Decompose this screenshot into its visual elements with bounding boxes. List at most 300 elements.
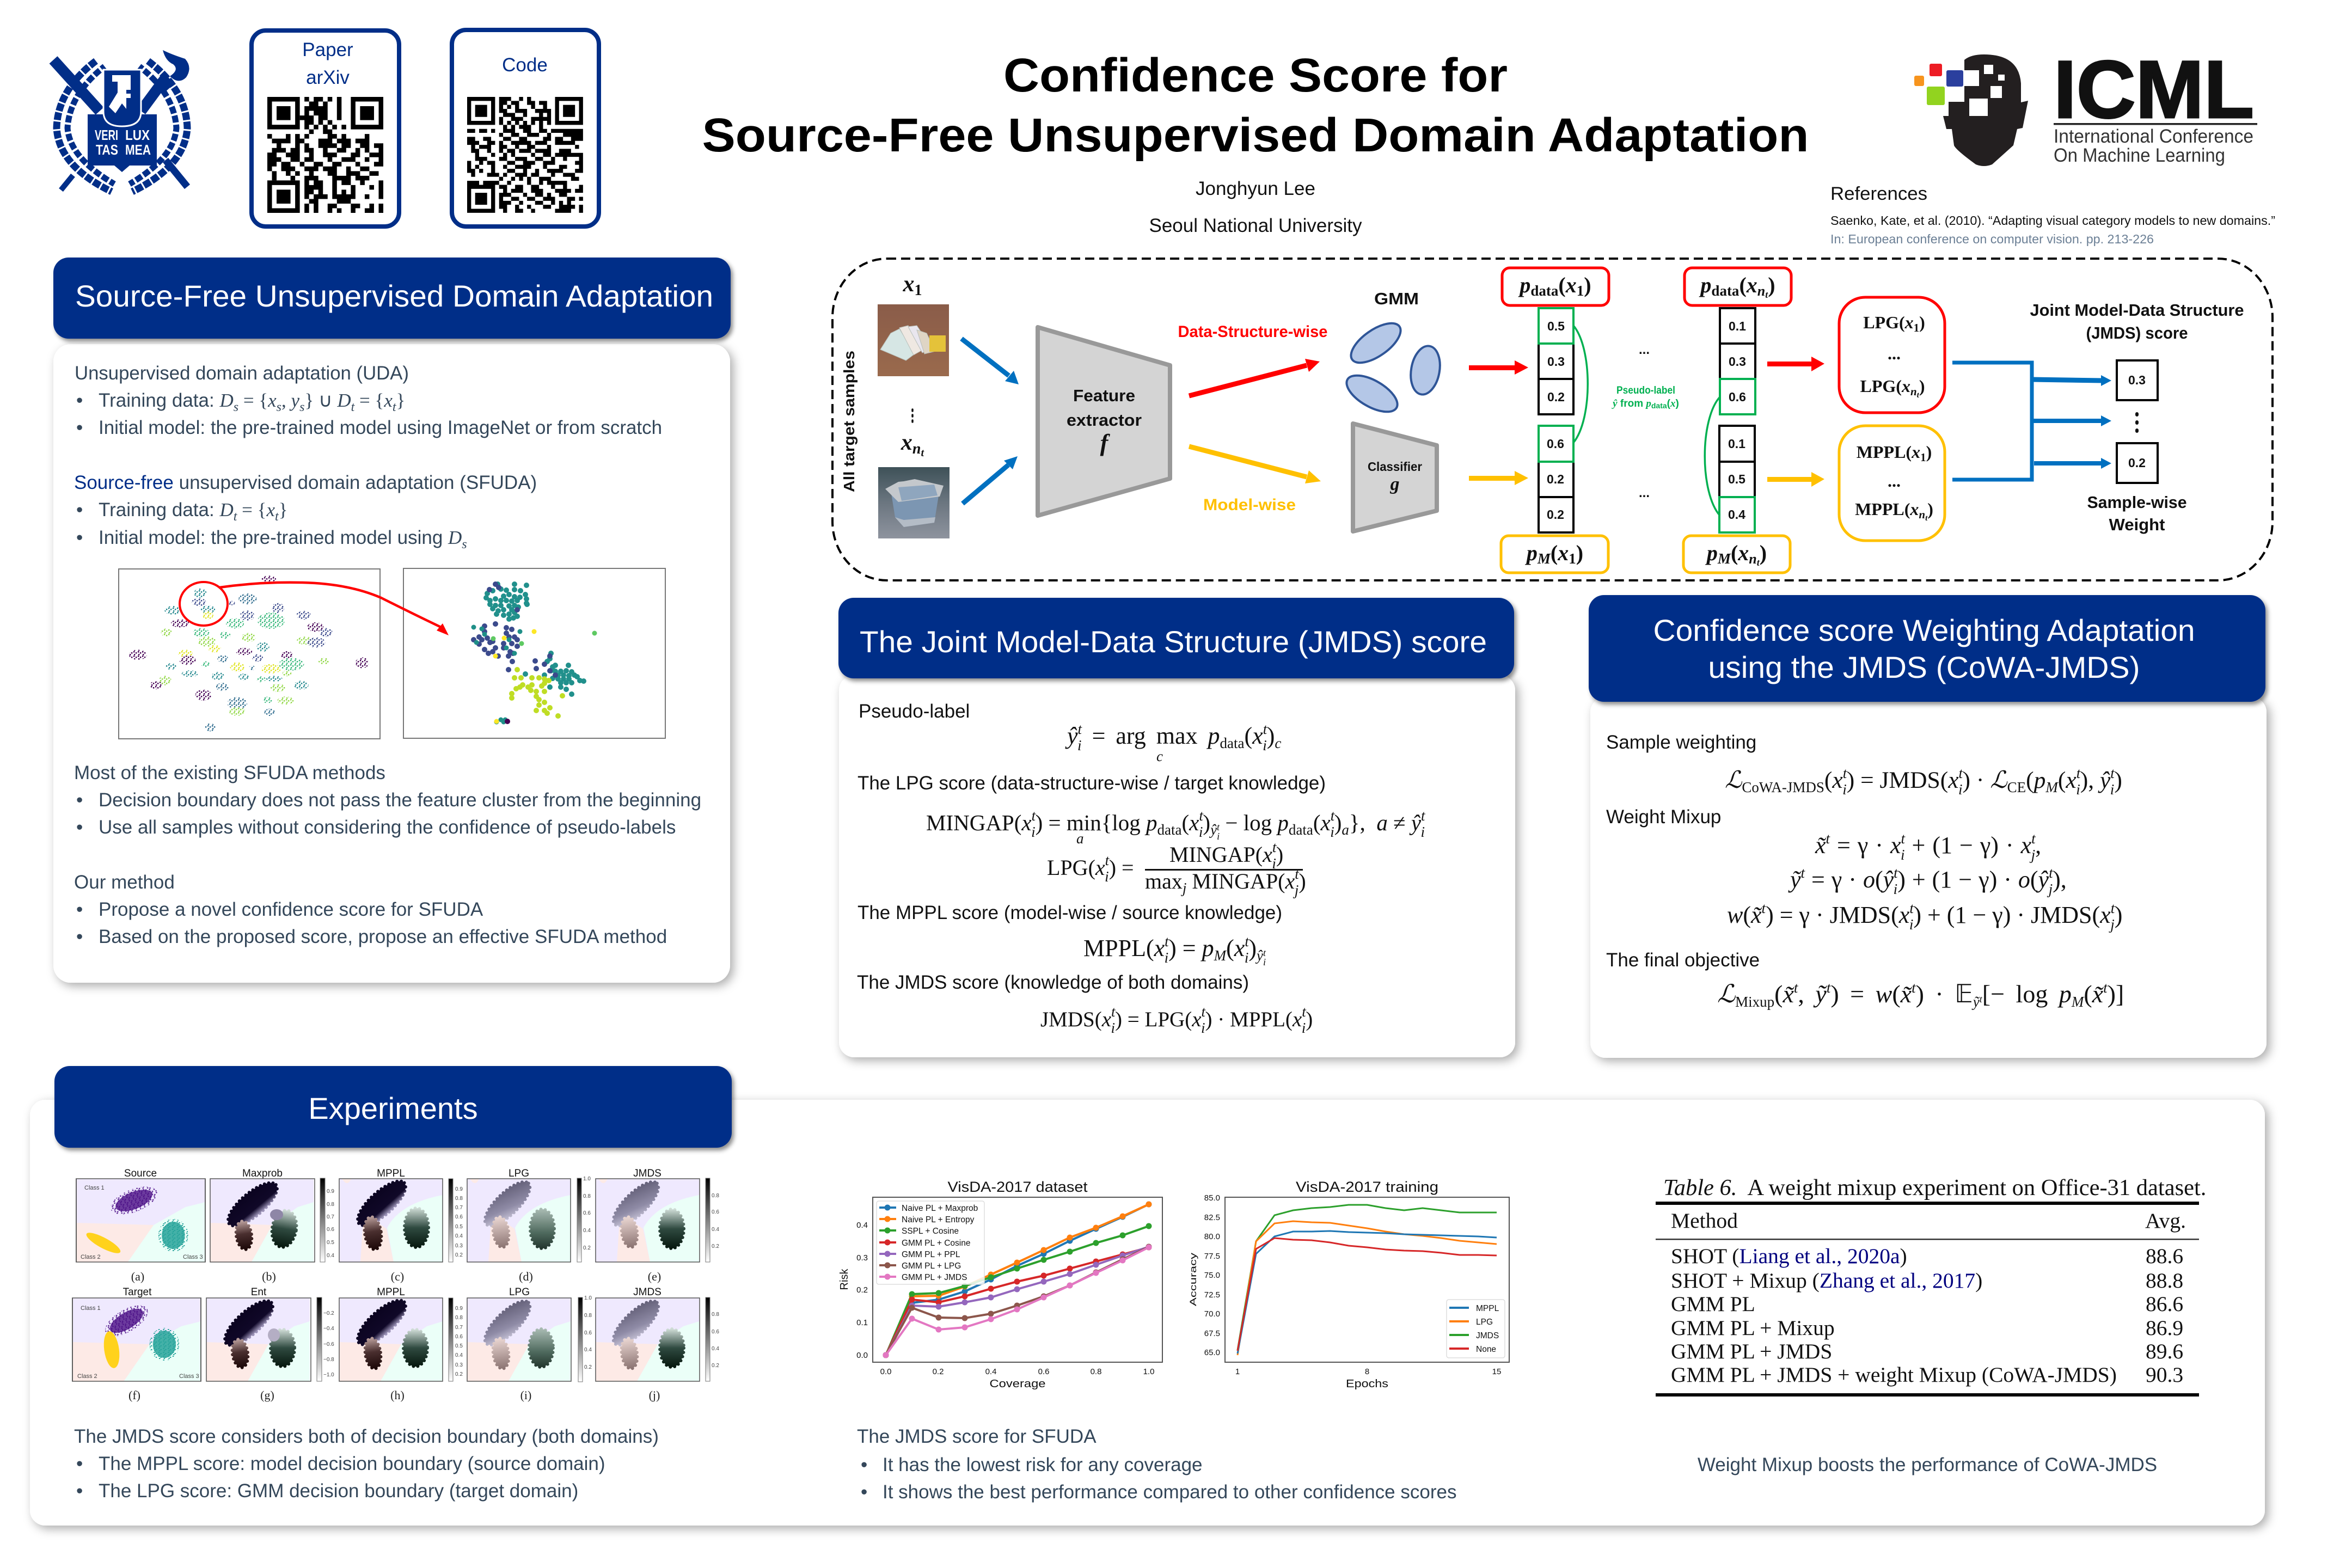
figure: decision boundary grid: MPPL xyxy=(377,1168,405,1179)
plot (g) entropy xyxy=(206,1294,311,1381)
equation: MINGAP: i xyxy=(1199,824,1203,840)
box: p_M x1 xyxy=(1501,536,1608,573)
table: weight mixup experiment: SHOT + Mixup (Zhang et al., 2017) xyxy=(1671,1269,1982,1293)
equation: mixup x: t xyxy=(1826,830,1831,847)
text block: SFUDA: • xyxy=(76,499,83,520)
text block: UDA: s xyxy=(277,400,281,414)
figure: decision boundary grid: 0.4 xyxy=(455,1352,463,1358)
label: sample-wise weight: Sample-wise xyxy=(2087,493,2186,512)
equation: sample weighting: x xyxy=(2065,767,2077,793)
text block: UDA: x xyxy=(383,390,393,411)
equation: MINGAP: ŷ xyxy=(1209,822,1217,838)
equation: final objective: x̃ xyxy=(2092,980,2104,1008)
arrow: classifier to model probabilities xyxy=(1469,471,1528,485)
icon: university crest: VERI xyxy=(95,127,118,143)
equation: final objective: t xyxy=(1912,979,1916,996)
equation: pseudo label: x xyxy=(1252,722,1263,749)
equation: MPPL: p xyxy=(1200,935,1214,961)
arrow: to weight dots xyxy=(2032,415,2111,426)
figure: decision boundary grid: 0.5 xyxy=(455,1343,463,1349)
panel: CoWA-JMDS body: Weight Mixup xyxy=(1606,806,1721,828)
equation: pseudo label: i xyxy=(1263,737,1267,754)
label: JMDS score: Joint Model-Data Structure xyxy=(2030,301,2244,320)
classifier: Classifier xyxy=(1368,460,1422,474)
table: weight mixup experiment: Method xyxy=(1671,1209,1738,1233)
text block: JMDS for SFUDA: • xyxy=(861,1481,867,1503)
text block: UDA: Training data: D xyxy=(99,390,234,411)
line chart: VisDA-2017 training accuracy: 67.5 xyxy=(1204,1329,1220,1338)
probability column: data xnt xyxy=(1720,308,1755,414)
text block: existing methods: Most of the existing SFUDA methods xyxy=(74,762,385,783)
figure: decision boundary grid: 0.6 xyxy=(455,1214,463,1220)
text block: UDA: s xyxy=(234,400,238,414)
line chart: VisDA-2017 training accuracy: VisDA-2017 training xyxy=(1296,1179,1438,1195)
probability column: model x1: 0.6 xyxy=(1547,437,1564,451)
box: LPG scores: 1 xyxy=(1914,321,1919,334)
equation: LPG: j xyxy=(1181,880,1186,896)
line chart: VisDA-2017 training accuracy: 70.0 xyxy=(1204,1309,1220,1319)
line chart: VisDA-2017 dataset risk: 0.3 xyxy=(856,1253,868,1263)
equation: JMDS: ) · MPPL( xyxy=(1205,1008,1293,1031)
equation: mixup x: + (1 − γ) · xyxy=(1905,832,2021,859)
text block: existing methods xyxy=(74,762,701,838)
figure: decision boundary grid: 0.6 xyxy=(712,1329,719,1335)
table: weight mixup experiment: GMM PL xyxy=(1671,1292,1755,1316)
label: JMDS score xyxy=(2030,301,2244,342)
chart legend: MPPL xyxy=(1476,1304,1499,1313)
text block: existing methods: Use all samples without considering the confidence of pseudo-labels xyxy=(99,817,676,838)
text block: our method: • xyxy=(76,899,83,920)
equation: final objective: p xyxy=(2057,980,2072,1008)
chart legend: SSPL + Cosine xyxy=(902,1227,959,1236)
equation: MINGAP: ( xyxy=(1182,810,1189,835)
box: LPG scores xyxy=(1839,297,1945,413)
equation: final objective: ( xyxy=(1774,980,1783,1008)
line chart: VisDA-2017 training accuracy: 15 xyxy=(1492,1367,1501,1376)
box: p_data x1: 1 xyxy=(1577,283,1584,299)
figure: decision boundary grid: Maxprob xyxy=(242,1168,283,1179)
text block: UDA: • xyxy=(76,390,83,411)
text block: JMDS for SFUDA: • xyxy=(861,1454,867,1475)
table: weight mixup experiment: SHOT (Liang et al., 2020a) xyxy=(1671,1244,1907,1268)
equation: final objective: [− log xyxy=(1982,980,2059,1008)
label: JMDS score: (JMDS) score xyxy=(2086,323,2188,342)
equation: MINGAP: x xyxy=(1320,810,1331,835)
figure: decision boundary grid: 0.3 xyxy=(455,1243,463,1249)
line chart: VisDA-2017 dataset risk: 1.0 xyxy=(1143,1367,1154,1376)
connector: combine scores xyxy=(1952,363,2032,480)
box: MPPL scores: ) xyxy=(1927,499,1933,519)
box: p_M xnt: p xyxy=(1707,541,1718,565)
panel: CoWA-JMDS body: The final objective xyxy=(1606,950,1760,971)
text block: our method: Based on the proposed score, propose an effective SFUDA method xyxy=(99,926,667,947)
figure: decision boundary grid: −0.6 xyxy=(323,1342,334,1347)
chart legend: GMM PL + LPG xyxy=(902,1261,961,1271)
equation: LPG: j xyxy=(1293,882,1298,898)
equation: sample weighting: t xyxy=(2077,765,2081,781)
figure: decision boundary grid: 0.4 xyxy=(327,1253,334,1259)
plot (f) target xyxy=(72,1298,201,1381)
box: p_M x1: ) xyxy=(1576,541,1583,565)
heading: CoWA-JMDS xyxy=(1589,595,2265,702)
text block: JMDS decision boundary: The LPG score: GMM decision boundary (target domain) xyxy=(99,1480,578,1502)
figure: decision boundary grid: 0.9 xyxy=(455,1186,463,1192)
title xyxy=(702,49,1809,162)
equation: pseudo label: t xyxy=(1263,721,1268,737)
panel: JMDS body: The JMDS score (knowledge of both domains) xyxy=(857,972,1249,993)
text block: UDA: t xyxy=(351,400,356,414)
text block: SFUDA: Training data: D xyxy=(99,499,234,520)
equation: mixup x: x̃ xyxy=(1815,832,1827,859)
text block: existing methods: Decision boundary does not pass the feature cluster from the beginning xyxy=(99,789,701,811)
line chart: VisDA-2017 dataset risk: Risk xyxy=(838,1269,850,1290)
text block: UDA: Unsupervised domain adaptation (UDA) xyxy=(75,363,409,384)
equation: sample weighting: ℒ xyxy=(1990,767,2008,794)
figure: decision boundary grid: 0.2 xyxy=(712,1244,719,1250)
figure: decision boundary grid: Ent xyxy=(251,1287,267,1298)
chart legend: JMDS xyxy=(1476,1331,1499,1340)
equation: mixup weight: j xyxy=(2109,916,2115,933)
equation: JMDS: ) = LPG( xyxy=(1115,1008,1192,1031)
text block: UDA: } ∪ xyxy=(304,390,337,411)
box: weight 0.3 xyxy=(2117,360,2158,400)
arrow: model-wise xyxy=(1189,446,1321,483)
equation: final objective: )] xyxy=(2108,980,2124,1008)
equation: sample weighting: ) · xyxy=(1963,767,1990,793)
heading: CoWA-JMDS: using the JMDS (CoWA-JMDS) xyxy=(1708,650,2140,684)
box: MPPL scores: n xyxy=(1919,508,1925,521)
equation: final objective: M xyxy=(2071,994,2085,1010)
box: p_M xnt: ( xyxy=(1731,541,1738,565)
equation: MPPL: MPPL(x xyxy=(1083,935,1165,961)
text block: SFUDA: • xyxy=(76,527,83,548)
equation: sample weighting: ℒ xyxy=(1725,767,1743,794)
text block: SFUDA xyxy=(74,472,537,552)
equation: MINGAP: p xyxy=(1144,810,1157,835)
figure: decision boundary grid: (c) xyxy=(391,1270,404,1283)
icon: university crest: TAS xyxy=(96,142,118,158)
text block: our method: Our method xyxy=(74,872,175,893)
panel: experiments body xyxy=(30,1100,2265,1526)
panel: JMDS body: Pseudo-label xyxy=(859,701,970,722)
equation: MINGAP: i xyxy=(1031,824,1036,840)
equation: final objective: ) · xyxy=(1916,980,1955,1008)
equation: sample weighting: x xyxy=(1947,767,1959,793)
equation: JMDS: ) xyxy=(1306,1008,1313,1031)
text block: UDA: , xyxy=(281,390,291,411)
text block: our method xyxy=(74,872,667,947)
figure: decision boundary grid: (i) xyxy=(520,1388,531,1402)
figure: decision boundary grid: Class 2 xyxy=(81,1254,101,1260)
equation: final objective: t xyxy=(1827,979,1832,996)
equation: MPPL: t xyxy=(1263,947,1266,958)
box: LPG scores: ) xyxy=(1919,313,1925,332)
figure: decision boundary grid: 0.2 xyxy=(455,1371,463,1377)
icon: ICML logo: On Machine Learning xyxy=(2054,145,2225,166)
figure: decision boundary grid: 0.2 xyxy=(584,1364,592,1370)
figure: decision boundary grid: 0.8 xyxy=(712,1193,719,1199)
panel: JMDS body: The MPPL score (model-wise / source knowledge) xyxy=(857,902,1282,923)
image: plastic container sample: n xyxy=(912,440,921,457)
equation: pseudo label: ) xyxy=(1267,722,1275,749)
figure: decision boundary grid: 0.7 xyxy=(455,1325,463,1331)
box: p_data x1: ( xyxy=(1558,273,1566,297)
text block: UDA xyxy=(75,363,662,438)
equation: LPG xyxy=(1047,839,1306,898)
table: weight mixup experiment: 86.6 xyxy=(2146,1292,2183,1316)
figure: decision boundary grid: LPG xyxy=(509,1168,529,1179)
text block: table caption: Weight Mixup boosts the performance of CoWA-JMDS xyxy=(1698,1454,2157,1475)
title: Source-Free Unsupervised Domain Adaptation xyxy=(702,109,1809,162)
equation: mixup y: o(ŷ xyxy=(1863,866,1894,893)
equation: sample weighting: t xyxy=(2110,765,2115,781)
figure: decision boundary grid: 0.4 xyxy=(455,1233,463,1239)
panel: paper QR code: Paper xyxy=(302,39,353,60)
title: Confidence Score for xyxy=(1003,49,1508,102)
box: LPG scores: LPG(x xyxy=(1860,376,1910,396)
references: Saenko, Kate, et al. (2010). “Adapting visual category models to new domains.” xyxy=(1830,213,2275,228)
figure: decision boundary grid: (d) xyxy=(519,1270,533,1283)
label: data-structure-wise: Data-Structure-wise xyxy=(1178,323,1327,341)
figure: decision boundary grid: 0.6 xyxy=(584,1330,592,1336)
icon: vertical ellipsis xyxy=(911,409,914,422)
box: p_data xnt: ( xyxy=(1739,273,1747,297)
chart legend: GMM PL + JMDS xyxy=(902,1273,967,1282)
probability column: data xnt: 0.6 xyxy=(1729,390,1746,404)
equation: MINGAP: i xyxy=(1421,824,1425,840)
probability column: data x1: 0.2 xyxy=(1547,390,1565,404)
equation: mixup y: = γ · xyxy=(1805,866,1863,893)
icon: ICML logo xyxy=(1914,44,2257,166)
text block: JMDS for SFUDA: It shows the best performance compared to other confidence scores xyxy=(883,1481,1456,1503)
figure: decision boundary grid: (b) xyxy=(262,1270,276,1283)
text block: JMDS for SFUDA xyxy=(857,1426,1456,1503)
equation: MINGAP: ) = min{log xyxy=(1036,810,1146,835)
figure: decision boundary grid: −0.8 xyxy=(323,1357,334,1363)
box: p_M x1: M xyxy=(1537,550,1551,567)
icon: QR code arXiv xyxy=(267,97,383,213)
equation: MINGAP: data xyxy=(1289,822,1313,838)
equation: final objective: w(x̃ xyxy=(1876,980,1912,1008)
equation: MPPL: x xyxy=(1234,935,1245,961)
chart legend xyxy=(877,1201,984,1284)
feature extractor: Feature xyxy=(1073,386,1135,405)
probability column: model xnt: 0.4 xyxy=(1728,507,1745,522)
equation: JMDS: t xyxy=(1302,1003,1307,1020)
equation: sample weighting: ŷ xyxy=(2098,767,2111,793)
arrow: to weight n xyxy=(2034,458,2111,469)
box: weight 0.2: 0.2 xyxy=(2128,456,2146,470)
box: p_data xnt: p xyxy=(1700,273,1711,297)
equation: sample weighting: x xyxy=(1832,767,1843,793)
figure: decision boundary grid: 0.6 xyxy=(712,1209,719,1215)
equation: final objective: , xyxy=(1798,980,1815,1008)
equation: mixup weight: t xyxy=(2111,900,2116,916)
box: weight 0.2 xyxy=(2117,443,2158,483)
figure: decision boundary grid: 0.6 xyxy=(455,1334,463,1340)
chart legend xyxy=(1447,1300,1505,1358)
figure: decision boundary grid: −0.2 xyxy=(323,1310,334,1316)
figure: decision boundary grid: (f) xyxy=(128,1388,140,1402)
equation: MPPL: ( xyxy=(1226,935,1234,961)
equation: pseudo label: c xyxy=(1275,735,1281,751)
figure: decision boundary grid: Source xyxy=(124,1168,157,1179)
equation: sample weighting: ), xyxy=(2080,767,2100,793)
arrow: data to LPG xyxy=(1767,357,1824,371)
colorbars row 1 xyxy=(320,1178,710,1262)
equation: MINGAP: i xyxy=(1330,824,1334,840)
box: p_M xnt: M xyxy=(1717,550,1731,567)
equation: sample weighting: i xyxy=(2076,781,2080,798)
figure: decision boundary grid: 0.9 xyxy=(327,1189,334,1195)
equation: MINGAP: MINGAP(x xyxy=(926,810,1032,835)
line chart: VisDA-2017 training accuracy xyxy=(1188,1179,1509,1390)
equation: LPG: i xyxy=(1272,855,1276,872)
text block: SFUDA: Source-free unsupervised domain adaptation (SFUDA) xyxy=(74,472,537,493)
panel: JMDS body xyxy=(839,675,1515,1057)
probability column: data xnt: 0.1 xyxy=(1729,319,1746,333)
figure: decision boundary grid: 0.2 xyxy=(583,1245,591,1251)
line chart: VisDA-2017 dataset risk: 0.0 xyxy=(856,1351,868,1360)
colorbars row 2 xyxy=(317,1297,710,1382)
equation: MPPL: i xyxy=(1263,957,1266,967)
probability column: data x1: 0.5 xyxy=(1547,319,1565,333)
equation: mixup y: ) + (1 − γ) · xyxy=(1897,866,2018,893)
line chart: VisDA-2017 dataset risk: 0.4 xyxy=(985,1367,996,1376)
line chart: VisDA-2017 training accuracy: Accuracy xyxy=(1188,1252,1198,1306)
equation: sample weighting: ( xyxy=(2058,767,2066,793)
GMM clusters xyxy=(1341,289,1443,419)
equation: JMDS: t xyxy=(1111,1003,1116,1020)
line chart: VisDA-2017 training accuracy: 8 xyxy=(1365,1367,1369,1376)
equation: MINGAP: a ≠ ŷ xyxy=(1376,810,1421,835)
equation: MINGAP: t xyxy=(1032,807,1037,824)
chart legend: None xyxy=(1476,1345,1496,1354)
text block: UDA: y xyxy=(290,390,300,411)
text block: SFUDA: t xyxy=(275,510,279,524)
equation: mixup y: o(ŷ xyxy=(2018,866,2049,893)
equation: mixup weight: t xyxy=(1762,900,1767,916)
box: MPPL scores: ) xyxy=(1926,442,1932,462)
probability column: model xnt xyxy=(1719,426,1755,532)
box: p_M x1: 1 xyxy=(1569,550,1576,567)
equation: sample weighting: CE xyxy=(2007,779,2026,795)
equation: pseudo label: c xyxy=(1156,748,1163,764)
box: p_data xnt: x xyxy=(1747,273,1757,297)
figure: decision boundary grid: 0.7 xyxy=(327,1214,334,1220)
line chart: VisDA-2017 training accuracy: 75.0 xyxy=(1204,1271,1220,1280)
equation: MPPL: ) xyxy=(1248,935,1257,961)
text block: existing methods: • xyxy=(76,789,83,811)
text block: SFUDA: s xyxy=(462,537,467,552)
equation: mixup y: ), xyxy=(2053,866,2067,893)
equation: mixup x: t xyxy=(1901,830,1906,847)
table: weight mixup experiment: 86.9 xyxy=(2146,1316,2183,1340)
table: weight mixup experiment: GMM PL + Mixup xyxy=(1671,1316,1835,1340)
line chart: VisDA-2017 dataset risk: 0.1 xyxy=(856,1318,868,1327)
figure: decision boundary grid: 0.8 xyxy=(455,1315,463,1321)
text block: UDA: s xyxy=(299,400,304,414)
equation: pseudo label: ( xyxy=(1245,722,1252,749)
line chart: VisDA-2017 dataset risk: 0.4 xyxy=(856,1221,868,1230)
text block: UDA: = { xyxy=(238,390,268,411)
figure: decision boundary grid: 0.6 xyxy=(583,1210,591,1216)
equation: JMDS: i xyxy=(1302,1020,1306,1036)
icon: vertical dots xyxy=(2135,414,2139,431)
text block: JMDS decision boundary: The JMDS score considers both of decision boundary (both domains) xyxy=(74,1426,659,1447)
equation: JMDS: t xyxy=(1202,1003,1206,1020)
image: office supplies sample: x xyxy=(903,272,915,297)
icon: university crest: MEA xyxy=(125,142,151,158)
text block: our method: Propose a novel confidence score for SFUDA xyxy=(99,899,483,920)
heading: CoWA-JMDS: Confidence score Weighting Adaptation xyxy=(1653,613,2195,647)
arrow: sample n to extractor xyxy=(963,456,1018,504)
equation: final objective: ℒ xyxy=(1717,979,1736,1008)
image: office supplies sample: 1 xyxy=(915,282,922,299)
feature extractor: extractor xyxy=(1067,411,1142,430)
box: LPG scores: ) xyxy=(1919,376,1925,396)
box: p_M x1: x xyxy=(1558,541,1569,565)
equation: MINGAP: data xyxy=(1157,822,1182,838)
figure: decision boundary grid: (e) xyxy=(648,1270,661,1283)
text block: JMDS decision boundary: • xyxy=(76,1480,83,1502)
equation: mixup x: x xyxy=(2020,832,2032,859)
text block: SFUDA: Initial model: the pre-trained model using D xyxy=(99,527,462,548)
panel: JMDS body: The LPG score (data-structure-wise / target knowledge) xyxy=(857,773,1326,794)
label: pseudo-label xyxy=(1612,385,1679,410)
equation: MPPL: ŷ xyxy=(1255,947,1263,964)
equation: mixup y: i xyxy=(1894,881,1897,897)
plot (e) JMDS xyxy=(596,1175,700,1262)
equation: LPG: t xyxy=(1295,866,1300,882)
equation: pseudo label: p xyxy=(1206,722,1220,749)
line chart: VisDA-2017 dataset risk: VisDA-2017 dataset xyxy=(947,1179,1088,1195)
figure: decision boundary grid: 0.8 xyxy=(455,1196,463,1202)
equation: JMDS: x xyxy=(1292,1008,1302,1031)
text block: existing methods: • xyxy=(76,817,83,838)
ellipsis markers xyxy=(1639,342,1650,500)
equation: mixup weight: x xyxy=(2099,902,2111,928)
box: p_data x1: ) xyxy=(1584,273,1591,297)
equation: mixup y: j xyxy=(2047,881,2053,897)
equation: MPPL: M xyxy=(1214,947,1227,964)
line chart: VisDA-2017 training accuracy: 82.5 xyxy=(1204,1213,1220,1222)
line chart: VisDA-2017 dataset risk xyxy=(838,1179,1162,1390)
box: p_M xnt: ) xyxy=(1760,541,1767,565)
line chart: VisDA-2017 training accuracy: Epochs xyxy=(1346,1378,1388,1390)
figure: decision boundary grid: (a) xyxy=(131,1270,144,1283)
figure: decision boundary grid: MPPL xyxy=(377,1287,405,1298)
panel: code QR code xyxy=(452,30,599,226)
figure: decision boundary grid: 0.4 xyxy=(712,1227,719,1233)
box: p_M xnt: n xyxy=(1749,551,1757,567)
label: sample-wise weight xyxy=(2087,493,2186,534)
figure: decision boundary grid: 1.0 xyxy=(584,1295,592,1301)
line chart: VisDA-2017 dataset risk: Coverage xyxy=(990,1378,1045,1390)
equation: LPG: ) xyxy=(1276,842,1283,867)
text block: UDA: = { xyxy=(354,390,384,411)
panel: overview diagram xyxy=(832,259,2273,580)
equation: MINGAP: ( xyxy=(1313,810,1320,835)
equation: JMDS: i xyxy=(1111,1020,1115,1036)
chart: t-SNE full xyxy=(119,569,380,739)
green pseudo-label connectors xyxy=(1573,326,1720,516)
image: plastic container sample: t xyxy=(921,447,925,459)
image: office supplies sample xyxy=(878,272,949,376)
plot (a) source xyxy=(76,1179,205,1262)
equation: sample weighting: ) = JMDS( xyxy=(1847,767,1948,793)
box: p_data x1 xyxy=(1502,268,1609,305)
